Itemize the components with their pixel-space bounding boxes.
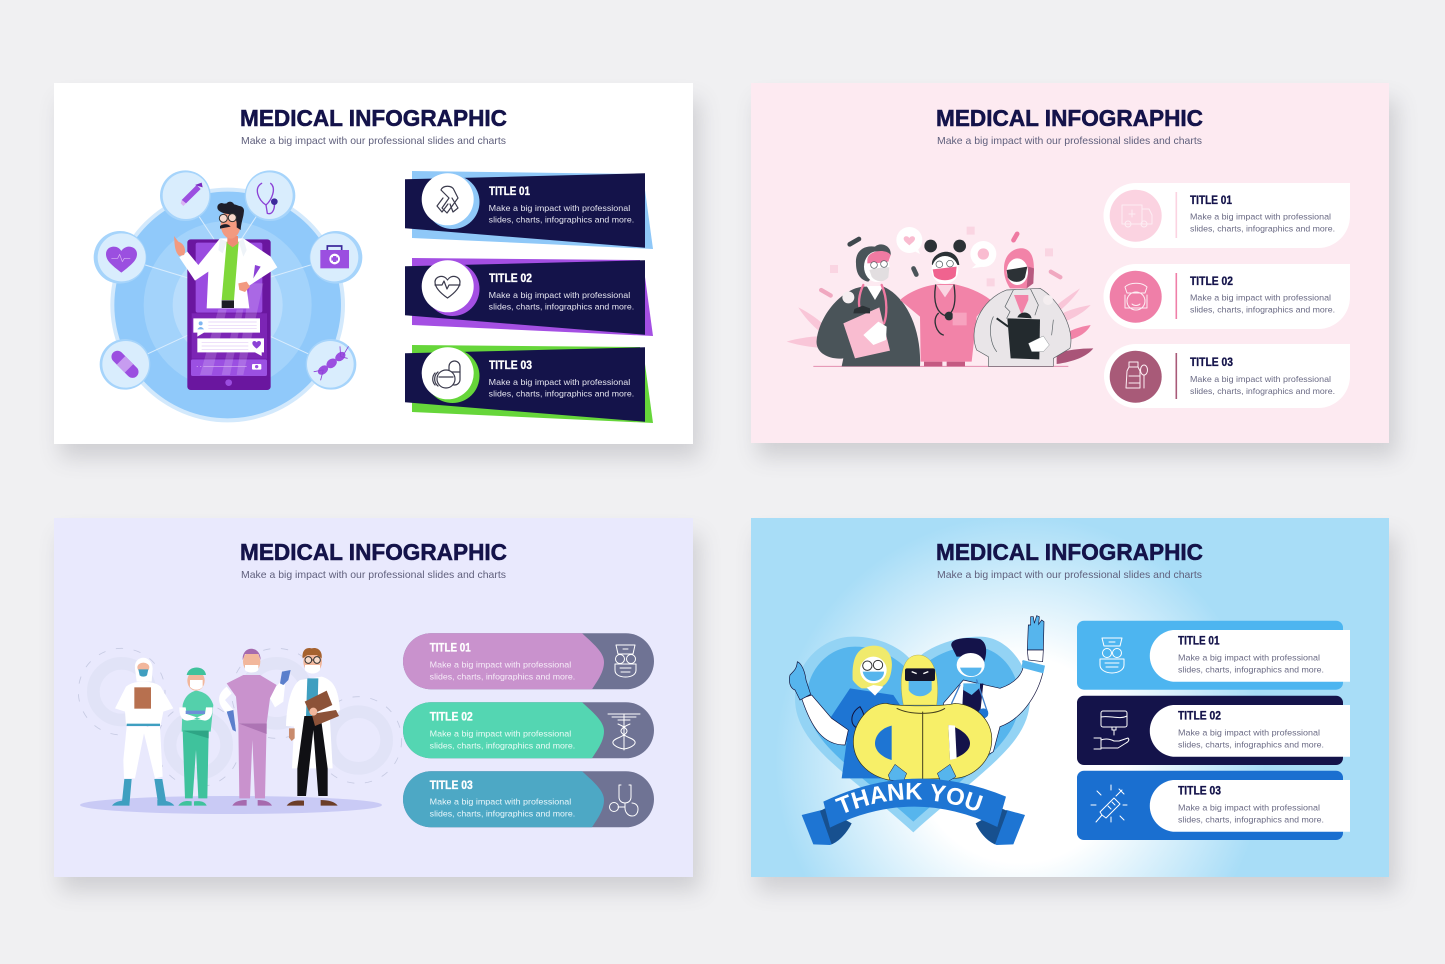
card: title 02: TITLE 02 (489, 273, 532, 285)
pill: title 02: slides, charts, infographics and more. (430, 740, 575, 750)
icon: syringe (181, 183, 203, 206)
medic: centre, yellow hazmat suit (853, 655, 992, 782)
card: title 03: TITLE 03 (489, 360, 532, 372)
pill: title 03: Make a big impact with professional (430, 796, 571, 806)
worker: doctor in white coat (286, 648, 340, 806)
icon: nurse with mask (1100, 638, 1124, 673)
card: title 03 (1104, 344, 1350, 408)
card: title 02 (1104, 264, 1350, 329)
icon: heart pulse (435, 276, 460, 298)
banner: thank you (802, 778, 1025, 845)
card: title 02: Make a big impact with professional (1190, 292, 1331, 302)
subtitle: Make a big impact with our professional slides and charts (937, 135, 1202, 147)
card: title 01: Make a big impact with professional (1178, 652, 1320, 662)
heading: MEDICAL INFOGRAPHIC (240, 539, 507, 565)
card: title 02: slides, charts, infographics and more. (1190, 304, 1335, 314)
card: title 02 (1077, 696, 1350, 765)
card: title 03 (1077, 771, 1350, 840)
icon: first aid kit (320, 246, 349, 268)
illustration: four healthcare workers (78, 648, 402, 814)
card: title 03: TITLE 03 (1178, 785, 1221, 797)
icon: ribbon (437, 186, 458, 213)
subtitle: Make a big impact with our professional slides and charts (241, 569, 506, 581)
card: title 01: TITLE 01 (489, 186, 531, 198)
medic: right, doctor waving (943, 616, 1045, 772)
pill: title 03: slides, charts, infographics and more. (430, 808, 575, 818)
card: title 03: TITLE 03 (1190, 357, 1233, 369)
card: title 01: Make a big impact with professional (1190, 212, 1331, 222)
card: title 01: TITLE 01 (1178, 635, 1220, 647)
panel: bottom-right blue slide (751, 518, 1389, 877)
panel shadows (60, 100, 1397, 891)
illustration: thank you heart and medics (789, 615, 1045, 845)
card: title 03: slides, charts, infographics and more. (489, 389, 634, 399)
illustration: doctor in phone with medical icons (94, 170, 362, 422)
heading: MEDICAL INFOGRAPHIC (936, 105, 1203, 131)
icon: heart (106, 247, 137, 273)
banner text: THANK YOU (834, 782, 983, 813)
card: title 01 (1104, 183, 1350, 248)
card: title 03: slides, charts, infographics and more. (1190, 386, 1335, 396)
pill: title 02: TITLE 02 (430, 712, 473, 724)
pill: title 03: TITLE 03 (430, 780, 473, 792)
heading: MEDICAL INFOGRAPHIC (936, 539, 1203, 565)
card: title 03: Make a big impact with professional (1178, 802, 1320, 812)
icon: stethoscope (257, 183, 277, 214)
card: title 02: TITLE 02 (1178, 710, 1221, 722)
icon: hand sanitizer (1094, 711, 1129, 749)
icon: nurse (1125, 283, 1147, 310)
medic: left, blonde nurse (789, 646, 900, 778)
card: title 02: Make a big impact with professional (489, 290, 630, 300)
subtitle: Make a big impact with our professional slides and charts (937, 569, 1202, 581)
icon: DNA (314, 347, 348, 380)
panel: top-right pink slide (751, 83, 1389, 443)
icon: ambulance (1122, 205, 1152, 227)
card: title 01 (1077, 621, 1350, 690)
medic: right, white coat (974, 248, 1071, 366)
card: title 02: slides, charts, infographics and more. (489, 302, 634, 312)
pill: title 01: TITLE 01 (430, 643, 471, 655)
card: title 03: Make a big impact with professional (1190, 374, 1331, 384)
pill: title 01: slides, charts, infographics and more. (430, 672, 575, 682)
medic: centre, pink scrubs (900, 240, 991, 366)
worker: hazmat suit (112, 658, 174, 806)
card: title 03 (405, 345, 653, 423)
pill: title 01: Make a big impact with professional (430, 660, 571, 670)
heading: MEDICAL INFOGRAPHIC (240, 105, 507, 131)
icon: syringe (1091, 785, 1127, 822)
icon: stethoscope (610, 785, 638, 816)
medic: left, grey scrubs (817, 244, 920, 366)
pill: title 02 (403, 702, 654, 758)
icon: bandage (109, 348, 141, 380)
phone (187, 239, 271, 390)
icon: medicine and spoon (1126, 362, 1148, 388)
icon: nurse with mask (615, 645, 636, 677)
panel: top-left white slide (54, 83, 693, 444)
card: title 02: Make a big impact with professional (1178, 728, 1320, 738)
pill: title 02: Make a big impact with professional (430, 728, 571, 738)
speech bubbles and pills (818, 227, 1063, 299)
card: title 02: slides, charts, infographics and more. (1178, 740, 1324, 750)
icon: pills (433, 361, 460, 388)
card: title 01: TITLE 01 (1190, 195, 1233, 207)
card: title 01: slides, charts, infographics and more. (1190, 224, 1335, 234)
doctor (174, 202, 277, 308)
card: title 01: slides, charts, infographics and more. (489, 215, 634, 225)
card: title 03: Make a big impact with professional (489, 377, 630, 387)
worker: teal scrubs (178, 667, 213, 806)
pill: title 01 (403, 633, 654, 689)
card: title 02: TITLE 02 (1190, 276, 1233, 288)
card: title 01: Make a big impact with professional (489, 203, 630, 213)
worker: purple scrubs (219, 649, 291, 806)
card: title 01 (405, 171, 653, 249)
card: title 01: slides, charts, infographics and more. (1178, 664, 1324, 674)
illustration: three masked medics (787, 227, 1093, 366)
panel: bottom-left lavender slide (54, 518, 693, 877)
icon: caduceus (608, 714, 640, 750)
subtitle: Make a big impact with our professional slides and charts (241, 135, 506, 147)
card: title 03: slides, charts, infographics and more. (1178, 814, 1324, 824)
pill: title 03 (403, 771, 654, 827)
card: title 02 (405, 258, 653, 336)
